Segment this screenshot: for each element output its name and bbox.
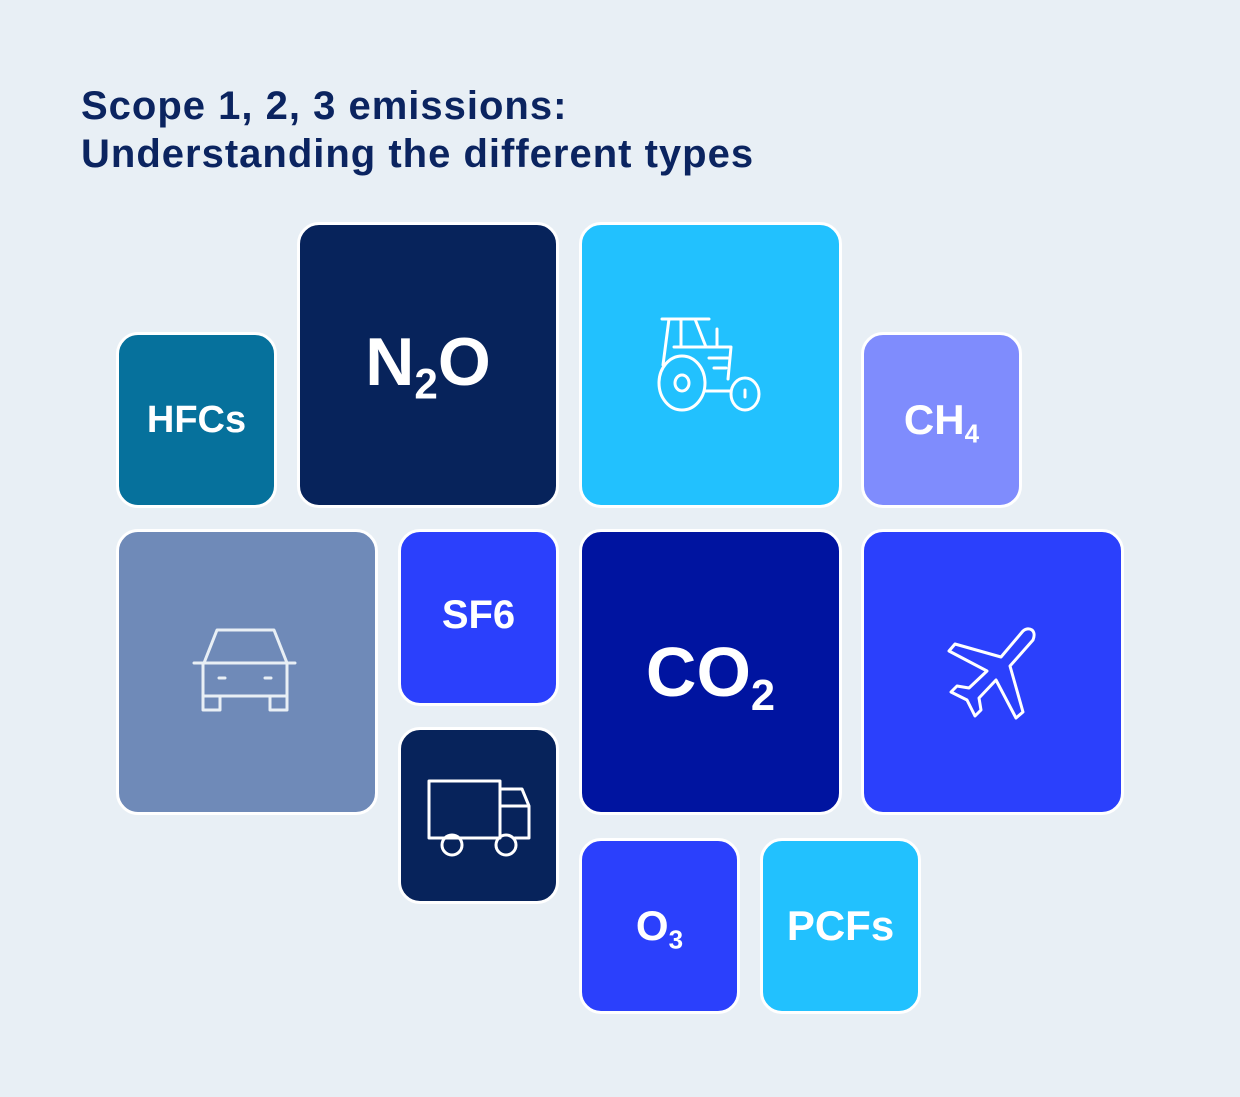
tile: PCFs: PCFs — [787, 902, 894, 949]
tile: tractor — [579, 222, 842, 508]
tile: O3 — [579, 838, 740, 1014]
tile: plane — [861, 529, 1124, 815]
tile: N2O: N2O — [365, 324, 491, 407]
title: Understanding the different types — [81, 132, 754, 176]
tile: CH4: CH4 — [904, 396, 979, 448]
tile: HFCs: HFCs — [147, 398, 246, 440]
title: Scope 1, 2, 3 emissions: — [81, 84, 567, 128]
icon: truck — [428, 780, 530, 856]
tile: car — [116, 529, 378, 815]
tile: O3: O3 — [636, 902, 683, 954]
tile: SF6 — [398, 529, 559, 706]
icon: plane — [947, 627, 1036, 720]
tile: SF6: SF6 — [442, 593, 515, 637]
tile: HFCs — [116, 332, 277, 508]
tile: CH4 — [861, 332, 1022, 508]
tile: CO2 — [579, 529, 842, 815]
tile: CO2: CO2 — [646, 633, 775, 720]
title — [81, 84, 754, 176]
tile: N2O — [297, 222, 559, 508]
tile: truck — [398, 727, 559, 904]
icon: tractor — [658, 318, 760, 412]
tile: PCFs — [760, 838, 921, 1014]
icon: car — [192, 628, 296, 712]
